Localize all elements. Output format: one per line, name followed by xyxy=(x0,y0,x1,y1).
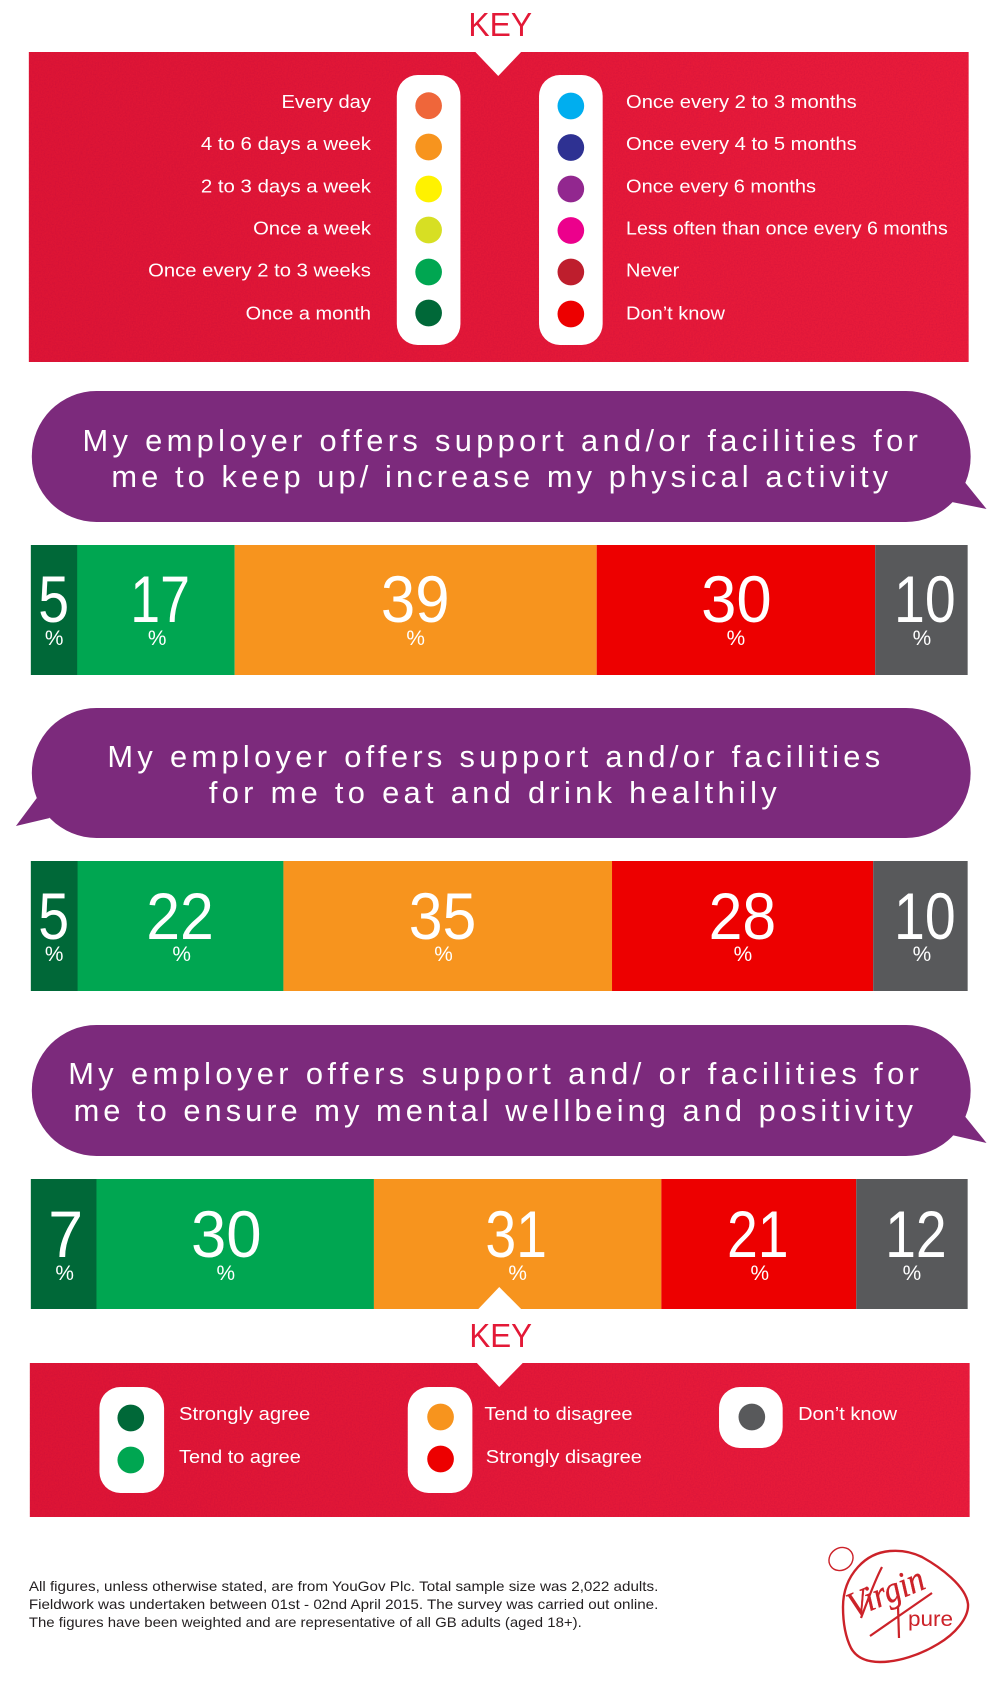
speech bubble: healthy eating: for me to eat and drink healthily xyxy=(209,775,777,810)
labels: left frequency: Once a month xyxy=(246,302,371,324)
footnote: All figures, unless otherwise stated, are from YouGov Plc. Total sample size was 2,022 adults. xyxy=(29,1578,658,1594)
stacked bar: healthy eating: 35 xyxy=(409,879,476,953)
stacked bar: mental wellbeing: % xyxy=(55,1262,74,1285)
stacked bar: physical activity xyxy=(31,545,968,675)
labels: left frequency: Once a week xyxy=(253,217,372,239)
speech bubble: physical activity: My employer offers support and/or facilities for xyxy=(83,423,918,458)
stacked bar: healthy eating: 22 xyxy=(146,879,214,953)
pill: agree dots xyxy=(99,1387,164,1493)
heading: bottom key: KEY xyxy=(469,1317,532,1354)
footnote: Fieldwork was undertaken between 01st - 02nd April 2015. The survey was carried out online. xyxy=(29,1596,658,1612)
labels: agree: Tend to agree xyxy=(179,1446,301,1467)
heading: top key: KEY xyxy=(468,6,532,43)
stacked bar: healthy eating: % xyxy=(172,943,191,966)
labels: disagree: Strongly disagree xyxy=(486,1446,642,1467)
labels: disagree xyxy=(484,1403,642,1467)
stacked bar: physical activity: % xyxy=(727,627,745,650)
labels: right frequency: Once every 4 to 5 months xyxy=(626,133,857,154)
stacked bar: healthy eating xyxy=(31,861,968,991)
labels: right frequency: Less often than once every 6 months xyxy=(626,217,948,239)
stacked bar: mental wellbeing: % xyxy=(903,1262,921,1285)
speech bubble: mental wellbeing: me to ensure my mental wellbeing and positivity xyxy=(74,1093,913,1128)
stacked bar: physical activity: % xyxy=(45,627,63,650)
stacked bar: mental wellbeing: 12 xyxy=(885,1197,947,1271)
labels: agree: Strongly agree xyxy=(179,1403,310,1424)
labels: left frequency: 2 to 3 days a week xyxy=(201,175,372,197)
stacked bar: healthy eating: % xyxy=(434,943,453,966)
stacked bar: physical activity: % xyxy=(406,627,425,650)
footnote xyxy=(29,1578,658,1630)
label: don't know: Don’t know xyxy=(798,1403,898,1424)
pill: right frequency dots xyxy=(539,75,603,345)
footnote: The figures have been weighted and are representative of all GB adults (aged 18+). xyxy=(29,1614,582,1630)
labels: left frequency: Once every 2 to 3 weeks xyxy=(148,259,371,281)
stacked bar: mental wellbeing: 21 xyxy=(727,1197,789,1271)
panel: frequency key xyxy=(29,52,969,362)
labels: right frequency: Don’t know xyxy=(626,302,726,324)
speech bubble: physical activity xyxy=(32,391,987,522)
stacked bar: mental wellbeing: % xyxy=(216,1262,235,1285)
speech bubble: mental wellbeing: My employer offers support and/ or facilities for xyxy=(68,1056,919,1091)
labels: left frequency: Every day xyxy=(281,91,372,112)
stacked bar: physical activity: 5 xyxy=(38,562,69,636)
stacked bar: healthy eating: 28 xyxy=(709,879,776,953)
logo: Virgin pure: Virgin xyxy=(841,1558,930,1625)
stacked bar: physical activity: 10 xyxy=(894,562,956,636)
pill: don't know dot xyxy=(719,1387,783,1448)
speech bubble: healthy eating xyxy=(16,708,971,838)
stacked bar: mental wellbeing: 31 xyxy=(485,1197,547,1271)
labels: right frequency: Once every 2 to 3 months xyxy=(626,91,857,112)
stacked bar: mental wellbeing: % xyxy=(508,1262,527,1285)
labels: right frequency: Once every 6 months xyxy=(626,175,816,197)
logo: Virgin pure: pure xyxy=(908,1608,953,1631)
stacked bar: healthy eating: % xyxy=(913,943,931,966)
stacked bar: physical activity: 39 xyxy=(381,562,450,636)
stacked bar: mental wellbeing: % xyxy=(751,1262,769,1285)
stacked bar: physical activity: 30 xyxy=(701,562,772,636)
labels: right frequency xyxy=(626,91,948,324)
stacked bar: healthy eating: % xyxy=(45,943,63,966)
logo: Virgin pure xyxy=(824,1543,968,1662)
stacked bar: healthy eating: 5 xyxy=(38,879,69,953)
stacked bar: physical activity: % xyxy=(148,627,166,650)
pill: left frequency dots xyxy=(397,75,460,345)
speech bubble: healthy eating: My employer offers support and/or facilities xyxy=(107,739,880,774)
labels: agree xyxy=(179,1403,310,1467)
stacked bar: physical activity: % xyxy=(913,627,931,650)
speech bubble: physical activity: me to keep up/ increase my physical activity xyxy=(111,459,889,494)
stacked bar: physical activity: 17 xyxy=(130,562,190,636)
stacked bar: mental wellbeing: 30 xyxy=(191,1197,262,1271)
speech bubble: mental wellbeing xyxy=(32,1025,987,1156)
stacked bar: healthy eating: % xyxy=(734,943,752,966)
labels: left frequency: 4 to 6 days a week xyxy=(201,133,372,154)
labels: right frequency: Never xyxy=(626,259,679,281)
panel: agreement key xyxy=(30,1363,970,1517)
labels: disagree: Tend to disagree xyxy=(484,1403,633,1424)
labels: left frequency xyxy=(148,91,372,324)
stacked bar: mental wellbeing xyxy=(31,1179,968,1309)
stacked bar: mental wellbeing: 7 xyxy=(48,1197,83,1271)
pill: disagree dots xyxy=(408,1387,472,1493)
stacked bar: healthy eating: 10 xyxy=(894,879,956,953)
